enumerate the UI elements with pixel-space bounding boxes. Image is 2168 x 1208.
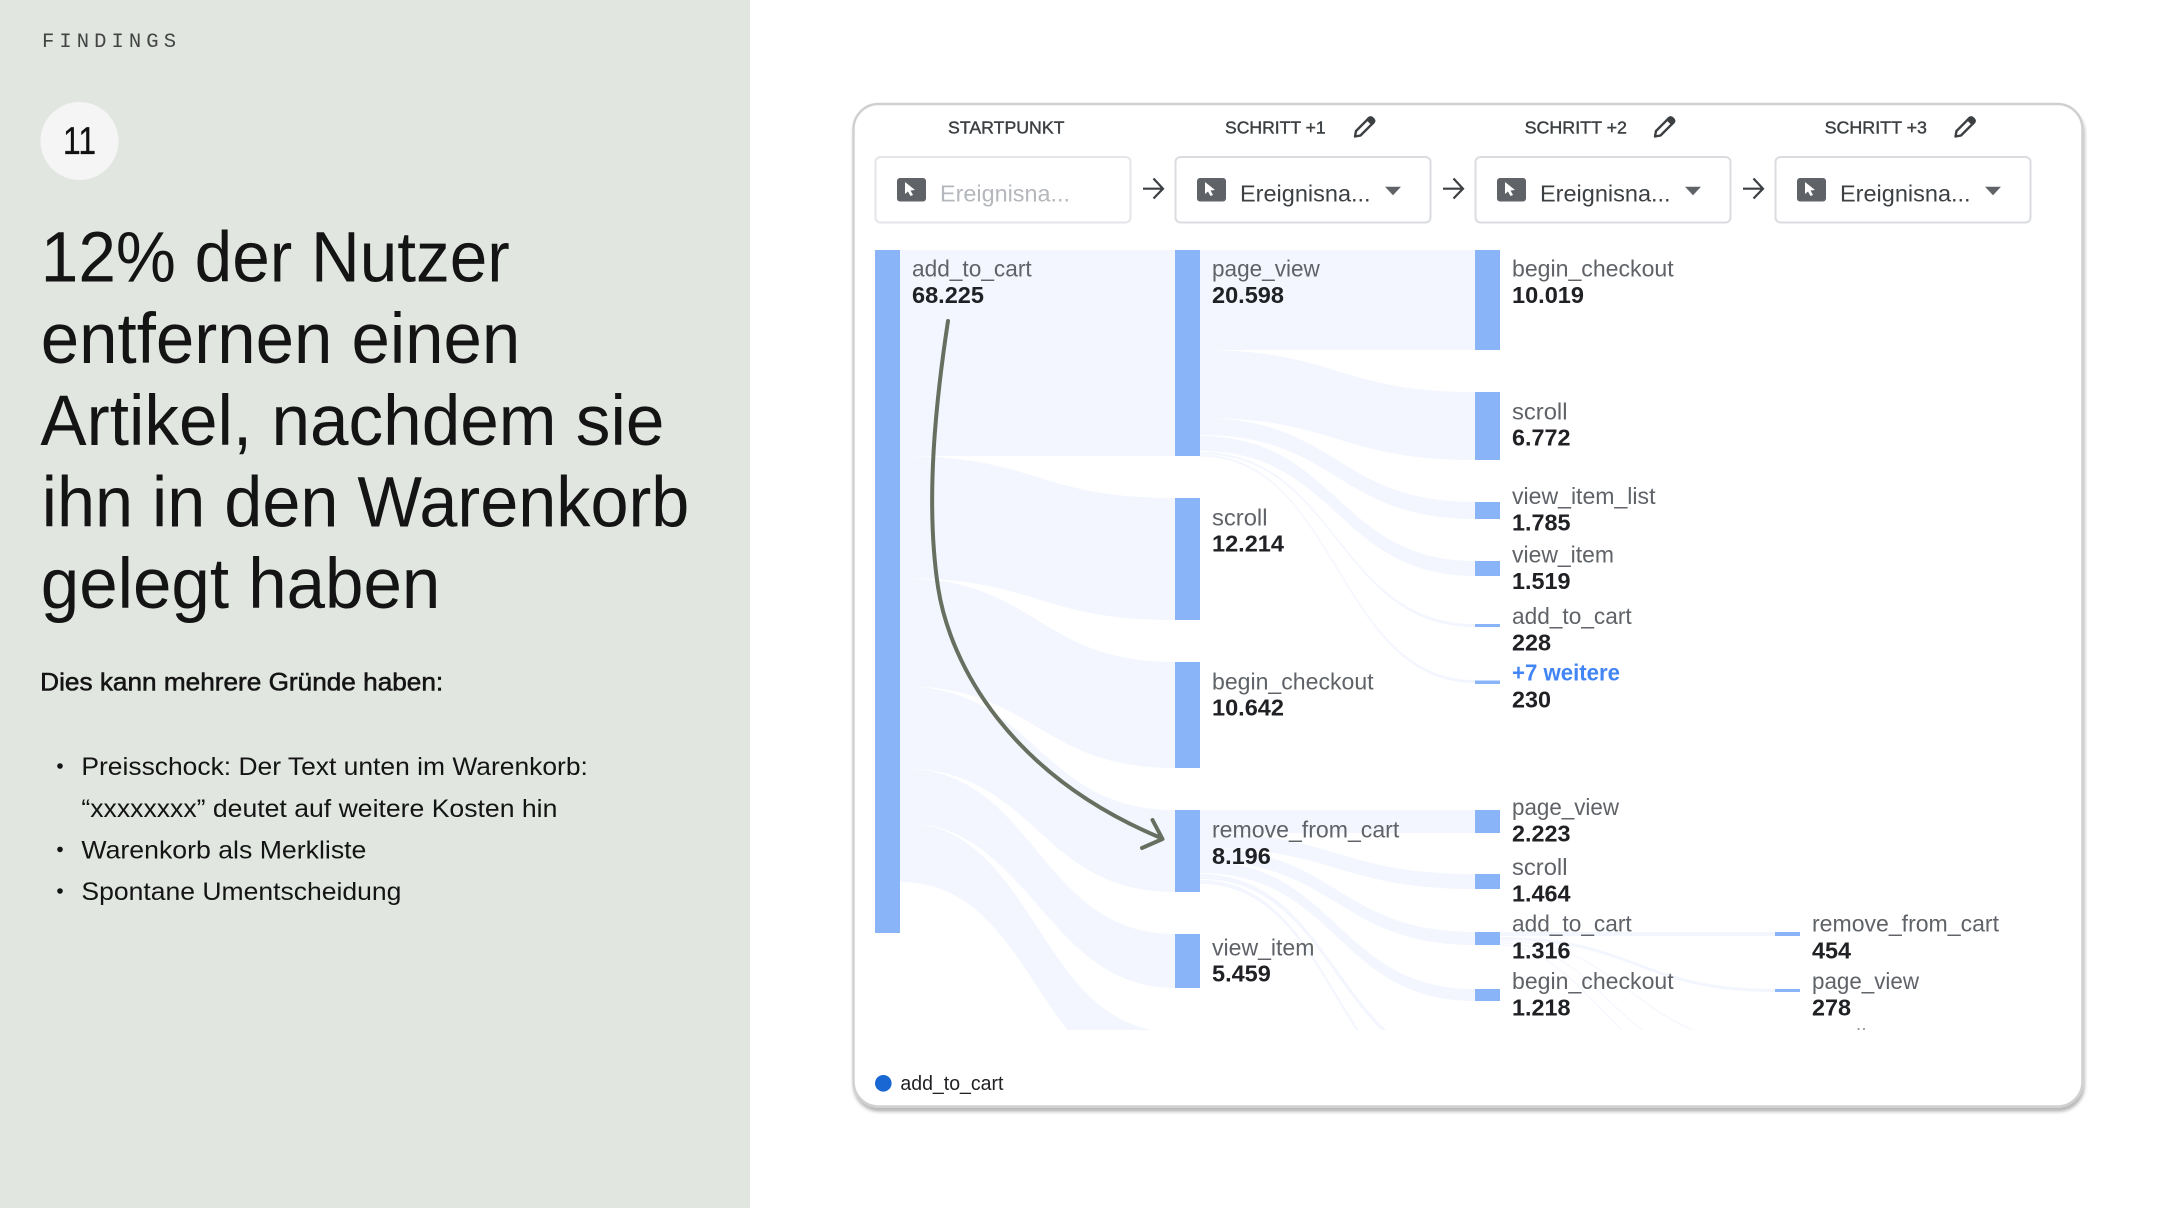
column headers: STARTPUNKT — [948, 117, 1065, 137]
column: step 1 nodes: scroll — [1212, 504, 1268, 530]
section label: FINDINGS: FINDINGS — [42, 31, 176, 54]
column: step 2 nodes: 1.785 — [1512, 510, 1570, 536]
title — [40, 219, 689, 624]
column: step 2 nodes: 1.316 — [1512, 937, 1570, 963]
panel: left sidebar — [0, 0, 750, 1208]
column: step 2 nodes: 228 — [1512, 630, 1551, 656]
column: step 2 nodes: 10.019 — [1512, 282, 1584, 308]
column: step 2 nodes — [1475, 250, 1674, 1021]
column: step 3 nodes — [1775, 911, 1999, 1030]
dropdown: step 1: Ereignisna... — [1240, 181, 1371, 207]
column: step 3 nodes: page_view — [1812, 968, 1920, 994]
bullet list: Preisschock: Der Text unten im Warenkorb: — [81, 753, 588, 781]
dropdown: start point: Ereignisna... — [940, 181, 1070, 207]
title: gelegt haben — [41, 545, 440, 624]
icon: edit pencil step 1 — [1355, 117, 1374, 136]
column: step 3 nodes: 278 — [1812, 995, 1851, 1021]
column headers: SCHRITT +3 — [1825, 117, 1927, 137]
title: 12% der Nutzer — [41, 219, 510, 298]
column: step 2 nodes: scroll — [1512, 854, 1568, 880]
column: step 1 nodes: page_view — [1212, 256, 1321, 282]
arrow: step 1 to step 2 — [1443, 178, 1463, 198]
number badge — [40, 102, 118, 180]
column: step 2 nodes: scroll — [1512, 398, 1568, 424]
dropdown: start point — [876, 157, 1130, 222]
bullet list — [57, 753, 588, 906]
column: startpunkt node — [875, 250, 1032, 933]
column: step 2 nodes: view_item — [1512, 542, 1614, 568]
title: ihn in den Warenkorb — [42, 464, 689, 542]
column: step 1 nodes: 10.642 — [1212, 695, 1284, 721]
title: Artikel, nachdem sie — [40, 382, 664, 461]
column: step 1 nodes: view_item — [1212, 934, 1314, 960]
column: step 1 nodes: 12.214 — [1212, 530, 1284, 556]
column: step 2 nodes: begin_checkout — [1512, 968, 1674, 994]
column headers: SCHRITT +2 — [1525, 117, 1627, 137]
column: step 1 nodes: begin_checkout — [1212, 668, 1374, 694]
column: step 2 nodes: begin_checkout — [1512, 256, 1674, 282]
column: step 2 nodes: 6.772 — [1512, 425, 1570, 451]
dropdown: step 1 — [1176, 157, 1430, 222]
icon: edit pencil step 2 — [1655, 117, 1674, 136]
intro text: Dies kann mehrere Gründe haben: — [40, 669, 443, 697]
title: entfernen einen — [41, 300, 520, 379]
column: step 2 nodes: view_item_list — [1512, 483, 1656, 509]
column: step 2 nodes: page_view — [1512, 794, 1620, 820]
arrow: add_to_cart to remove_from_cart — [932, 321, 1162, 848]
column headers: SCHRITT +1 — [1225, 117, 1326, 137]
column: step 1 nodes: remove_from_cart — [1212, 816, 1400, 842]
bullet list: Spontane Umentscheidung — [81, 878, 401, 906]
column: step 1 nodes: 8.196 — [1212, 843, 1271, 869]
bullet list: Warenkorb als Merkliste — [81, 836, 366, 864]
column: startpunkt node: add_to_cart — [912, 256, 1032, 282]
number badge: 11 — [63, 120, 96, 163]
column: step 2 nodes: 1.519 — [1512, 568, 1570, 594]
column: step 1 nodes: 20.598 — [1212, 282, 1284, 308]
arrow: step 2 to step 3 — [1743, 178, 1763, 198]
column: step 1 nodes: 5.459 — [1212, 960, 1271, 986]
column: step 2 nodes: 2.223 — [1512, 821, 1570, 847]
column: step 3 nodes: remove_from_cart — [1812, 911, 1999, 937]
legend: add_to_cart — [900, 1073, 1004, 1095]
column headers — [948, 117, 1927, 137]
column: step 1 nodes — [1175, 250, 1400, 988]
dropdown: step 3 — [1776, 157, 2030, 222]
panel: funnel card — [854, 104, 2082, 1114]
column: step 2 nodes: 1.218 — [1512, 995, 1570, 1021]
arrow: start to step 1 — [1143, 178, 1163, 198]
dropdown: step 2: Ereignisna... — [1540, 181, 1671, 207]
bullet list: “xxxxxxxx” deutet auf weitere Kosten hin — [81, 795, 557, 823]
column: step 2 nodes: 1.464 — [1512, 880, 1570, 906]
dropdown: step 2 — [1476, 157, 1730, 222]
column: step 2 nodes: add_to_cart — [1512, 911, 1632, 937]
column: step 2 nodes: add_to_cart — [1512, 603, 1632, 629]
column: startpunkt node: 68.225 — [912, 282, 984, 308]
icon: edit pencil step 3 — [1956, 117, 1975, 136]
sankey flows — [900, 250, 1775, 1114]
column: step 2 nodes: 230 — [1512, 686, 1551, 712]
dropdown: step 3: Ereignisna... — [1840, 181, 1971, 207]
column: step 2 nodes: +7 weitere — [1512, 660, 1620, 686]
column: step 3 nodes: 454 — [1812, 937, 1851, 963]
